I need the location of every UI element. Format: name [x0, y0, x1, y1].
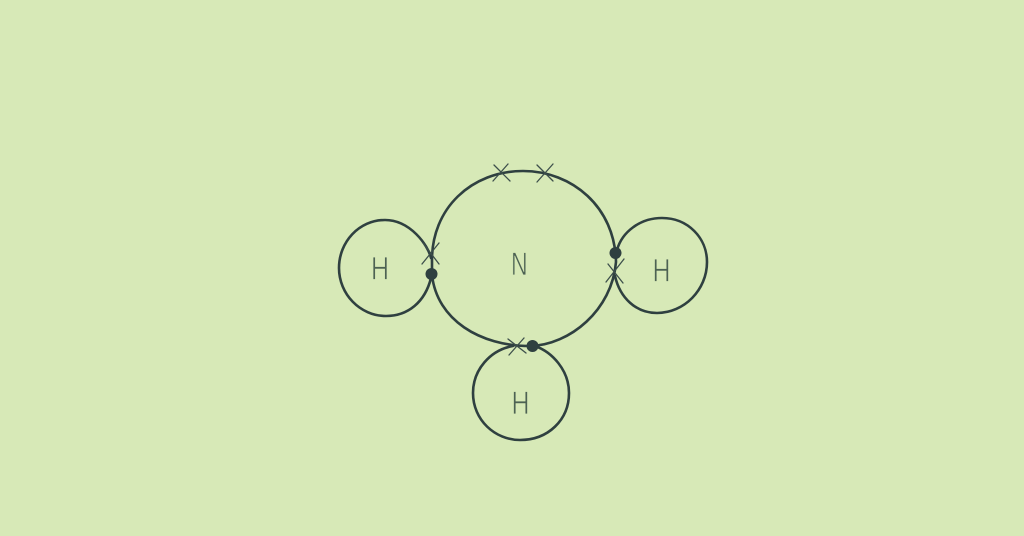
label: N: N: [511, 246, 528, 282]
cross: nitrogen lone pair electron 1: [493, 164, 510, 181]
cross: right bond electron: [606, 259, 624, 283]
dot: left bond electron: [426, 268, 438, 280]
label: H right: H: [652, 254, 671, 289]
cross: nitrogen lone pair electron 2: [537, 164, 553, 182]
dot: right bond electron: [610, 247, 622, 259]
cross: left bond electron: [422, 243, 439, 264]
left hydrogen atom shell: [339, 220, 431, 316]
label: H bottom: H: [512, 386, 530, 422]
cross: bottom bond electron: [508, 338, 526, 355]
nitrogen atom shell: [432, 171, 616, 346]
bottom hydrogen atom shell: [473, 346, 569, 440]
label: H left: H: [371, 252, 389, 287]
right hydrogen atom shell: [615, 218, 707, 313]
dot: bottom bond electron: [526, 340, 538, 352]
